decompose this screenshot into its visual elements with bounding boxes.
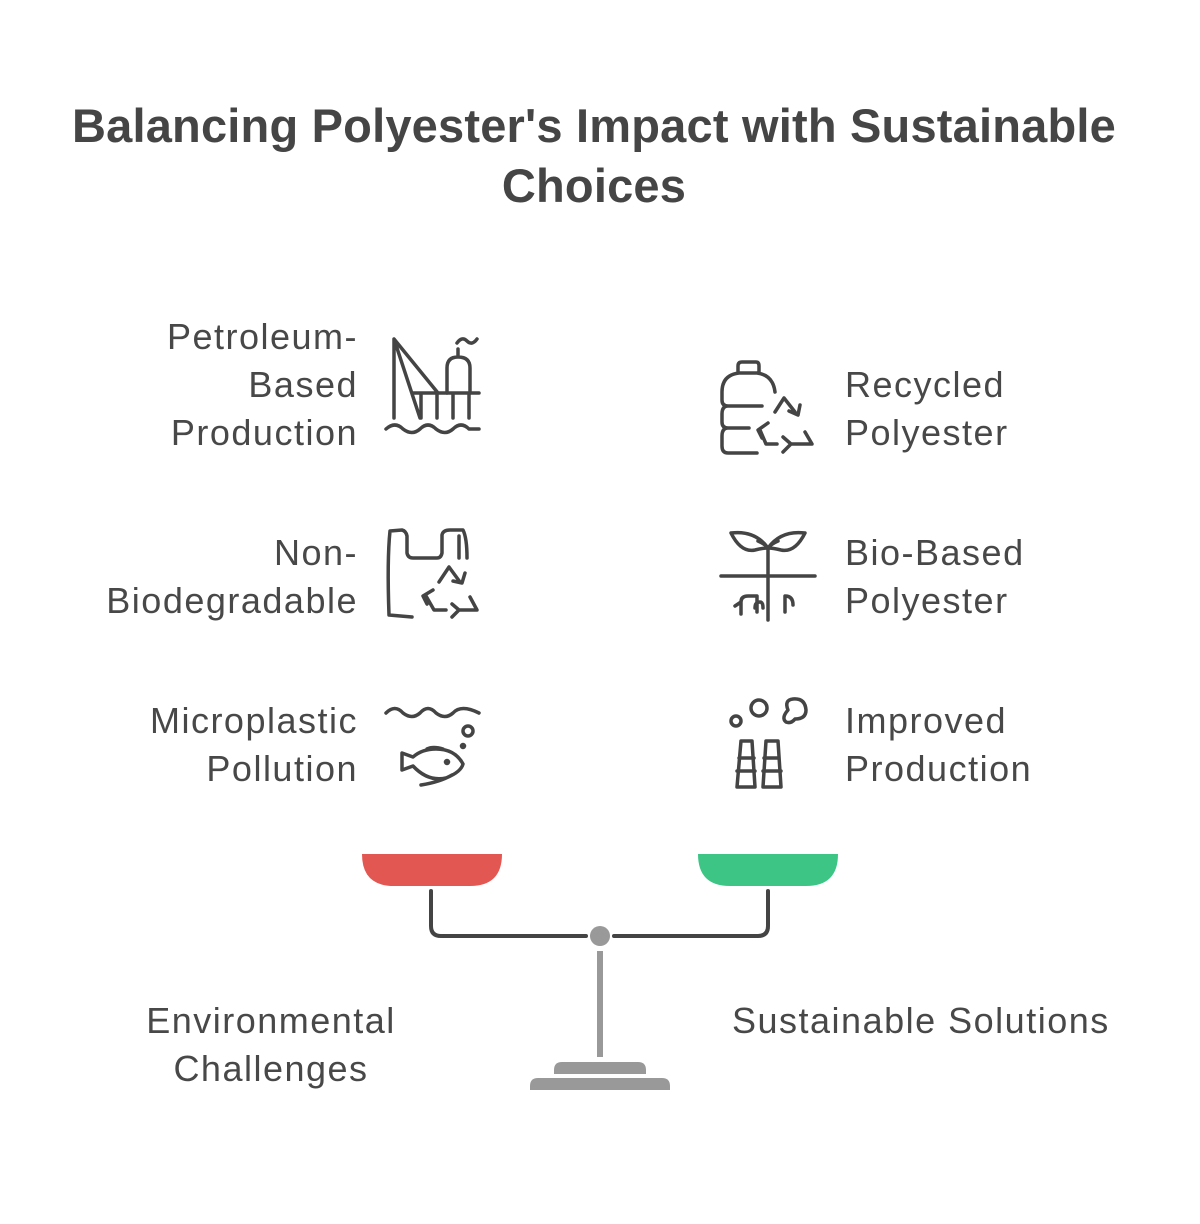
icon: fish under water (386, 708, 479, 785)
label: bio-based polyester: Bio-Based (845, 532, 1025, 573)
scale: green pan (698, 854, 838, 886)
label: recycled polyester: Polyester (845, 412, 1009, 453)
label: microplastic pollution (150, 700, 358, 789)
label: non-biodegradable (106, 532, 358, 621)
label: sustainable solutions: Sustainable Solutions (732, 1000, 1110, 1041)
icon: plastic bag with recycle (388, 530, 477, 617)
title: Choices (502, 159, 686, 212)
icon: factory chimneys with smoke (731, 699, 806, 787)
label: microplastic pollution: Microplastic (150, 700, 358, 741)
label: recycled polyester: Recycled (845, 364, 1005, 405)
label: petroleum-based production: Based (248, 364, 358, 405)
icon: bottle with recycle (722, 362, 812, 453)
scale: beam (431, 891, 768, 936)
label: petroleum-based production (167, 316, 358, 453)
scale: pole and base (530, 951, 670, 1090)
title: Balancing Polyester's Impact with Sustainable (72, 99, 1116, 152)
label: improved production: Improved (845, 700, 1007, 741)
icon: oil platform (386, 339, 479, 432)
scale: red pan (362, 854, 502, 886)
icon: plant with roots (721, 533, 815, 620)
title (72, 99, 1116, 212)
label: non-biodegradable: Biodegradable (106, 580, 358, 621)
label: improved production: Production (845, 748, 1032, 789)
label: improved production (845, 700, 1032, 789)
label: bio-based polyester (845, 532, 1025, 621)
label: microplastic pollution: Pollution (206, 748, 358, 789)
label: environmental challenges: Challenges (173, 1048, 369, 1089)
label: recycled polyester (845, 364, 1009, 453)
label: petroleum-based production: Petroleum- (167, 316, 358, 357)
scale: pivot (590, 926, 610, 946)
label: petroleum-based production: Production (171, 412, 358, 453)
label: bio-based polyester: Polyester (845, 580, 1009, 621)
label: environmental challenges: Environmental (146, 1000, 396, 1041)
label: non-biodegradable: Non- (274, 532, 358, 573)
label: environmental challenges (146, 1000, 396, 1089)
